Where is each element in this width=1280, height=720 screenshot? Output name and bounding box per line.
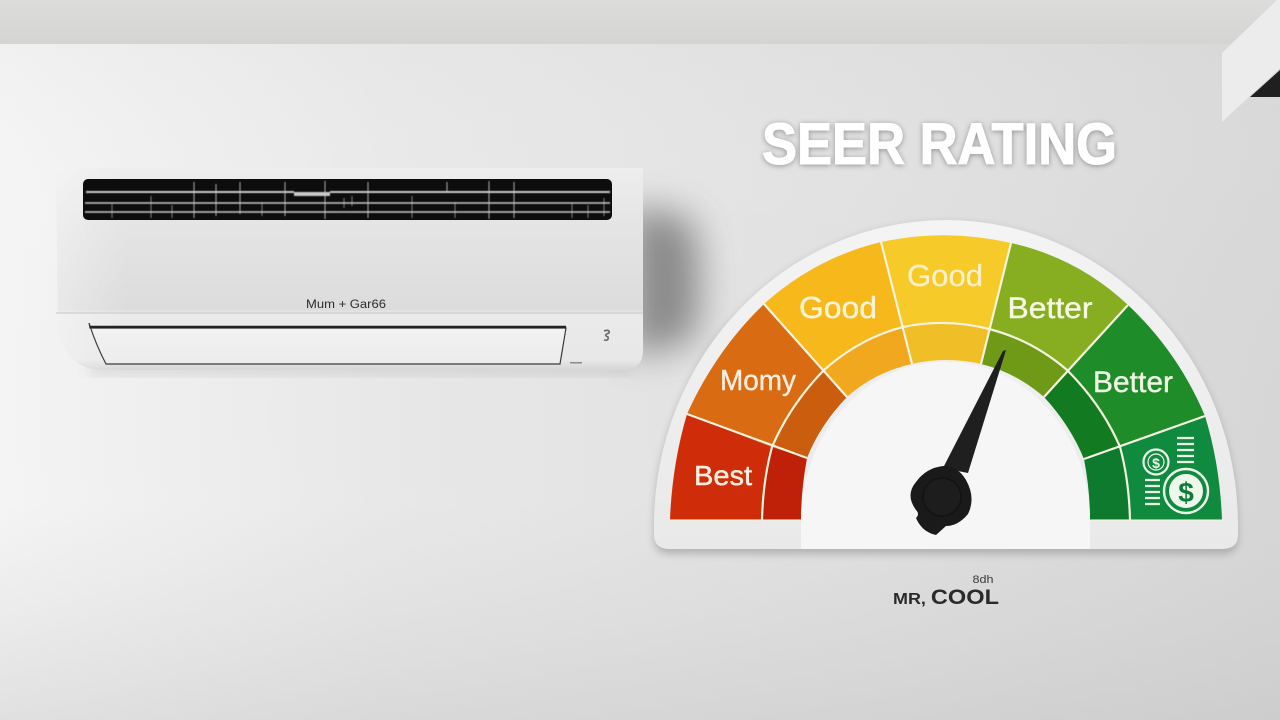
flap top edge <box>90 326 566 328</box>
unit shadow right <box>630 205 700 358</box>
title: SEER RATING <box>762 112 1117 177</box>
segment dividers <box>670 242 1222 520</box>
segment: orange <box>687 304 847 458</box>
label: Best: Best <box>694 460 752 491</box>
segment: green <box>1044 305 1205 459</box>
segment: teal green <box>1084 416 1222 520</box>
brand logo <box>893 574 999 609</box>
stacked bars lower <box>1145 480 1160 504</box>
status icon <box>604 330 609 340</box>
icon: coins and money <box>1144 438 1208 513</box>
label: Better lime: Better <box>1008 292 1093 325</box>
gauge shadow <box>654 223 1238 554</box>
label: Better green: Better <box>1093 366 1173 399</box>
segment: red <box>670 414 807 520</box>
hub inner ring <box>923 478 961 516</box>
logo wordmark: MR, COOL <box>893 586 999 609</box>
needle blade <box>943 350 1006 473</box>
brand text: Mum + Gar66 <box>306 299 386 311</box>
unit body <box>56 168 643 370</box>
air conditioner unit <box>56 168 700 374</box>
corner bracket top right <box>1222 0 1280 122</box>
label: Momy: Momy <box>720 365 796 397</box>
body highlight <box>56 168 643 370</box>
ceiling band <box>0 0 1280 44</box>
gauge needle <box>910 350 1006 535</box>
gauge frame <box>654 220 1238 549</box>
stacked bars upper <box>1177 438 1194 462</box>
body seam <box>56 312 643 314</box>
large coin: $ <box>1178 477 1194 508</box>
segment: lime <box>981 243 1128 397</box>
logo small mark: 8dh <box>972 574 994 586</box>
lower flap <box>89 323 566 364</box>
bottom sensor mark <box>570 362 582 364</box>
label: Good left: Good <box>799 290 877 325</box>
label: Good center: Good <box>907 258 983 293</box>
air intake grille <box>83 179 612 220</box>
needle hub <box>910 466 972 535</box>
small coin: $ <box>1152 455 1160 471</box>
unit shadow below <box>90 366 630 374</box>
gauge panel <box>654 220 1238 554</box>
segment: amber <box>764 242 912 397</box>
gauge hub <box>801 362 1090 549</box>
segment: yellow <box>881 235 1011 364</box>
